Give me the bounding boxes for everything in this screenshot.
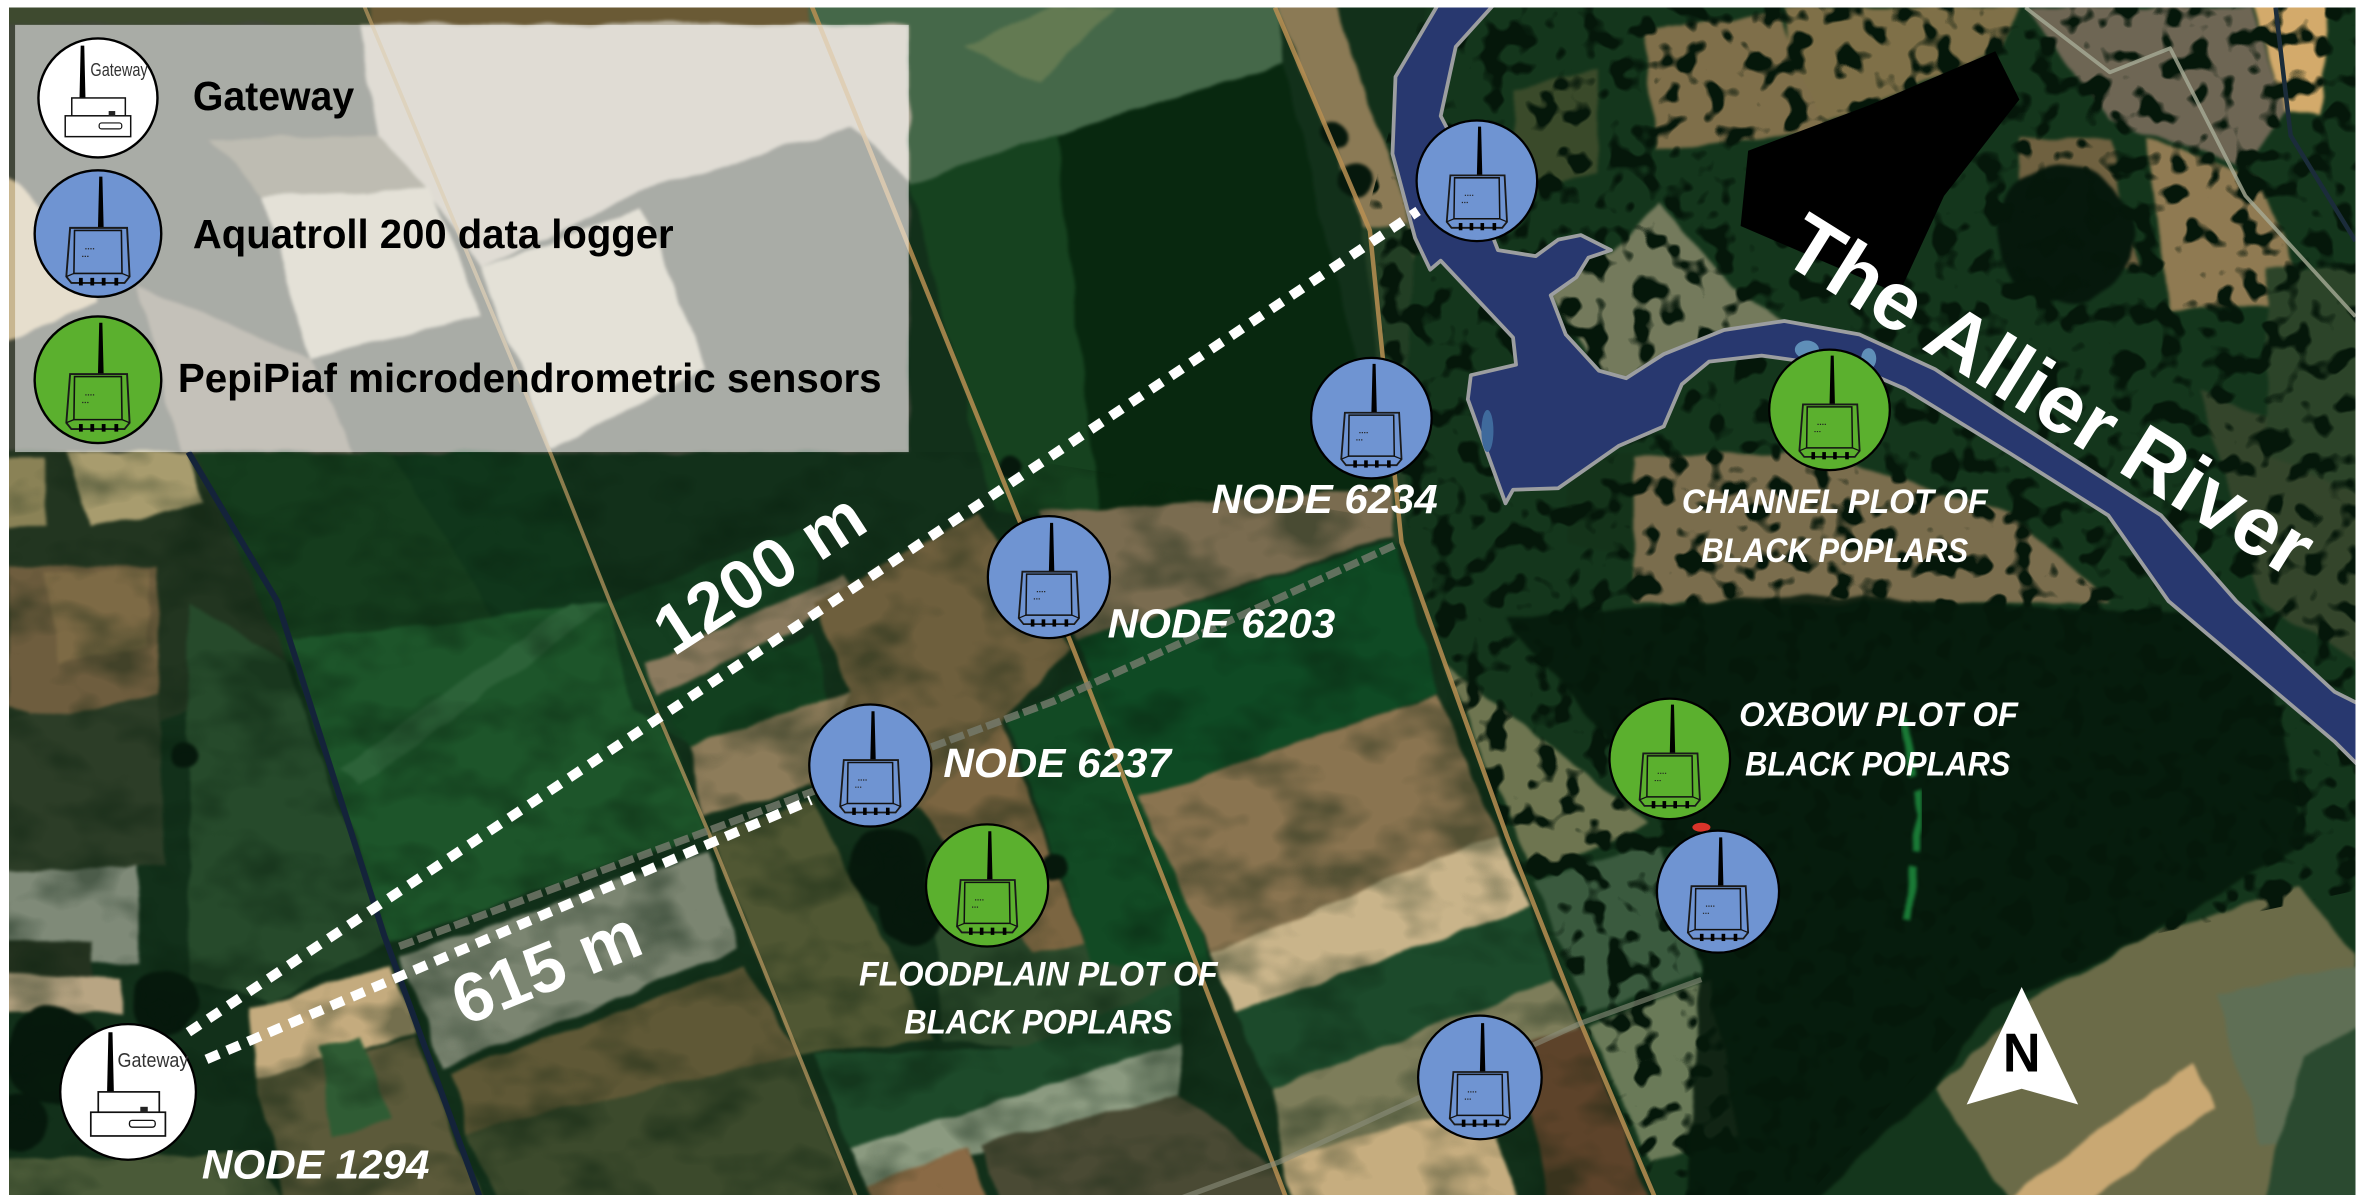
label: channel plot: CHANNEL PLOT OF — [1682, 483, 1989, 521]
node icon: 6237 — [809, 704, 931, 827]
node icon: south-east logger — [1657, 831, 1779, 953]
river: The Allier — [1392, 0, 2363, 781]
legend item: PepiPiaf microdendrometric sensors — [35, 316, 882, 443]
label: floodplain plot: BLACK POPLARS — [904, 1004, 1172, 1042]
panel: legend — [15, 25, 909, 452]
tree canopy texture, east side — [1364, 0, 2363, 1195]
sensor icon: floodplain plot — [926, 824, 1048, 946]
red marker — [1692, 823, 1710, 832]
river label: The Allier River — [1769, 196, 2331, 595]
label: floodplain plot: FLOODPLAIN PLOT OF — [859, 956, 1218, 994]
label: oxbow plot: OXBOW PLOT OF — [1739, 696, 2019, 734]
label: NODE 1294: NODE 1294 — [202, 1141, 429, 1187]
distance label: 1200 m: 1200 m — [639, 476, 879, 670]
node icon: 6203 — [988, 516, 1110, 638]
legend item: Aquatroll 200 data logger: Aquatroll 200 data logger — [193, 211, 674, 257]
sensor icon: channel plot — [1769, 350, 1890, 470]
label: oxbow plot: BLACK POPLARS — [1745, 745, 2010, 783]
farm fields, west side — [0, 0, 1650, 1204]
label: channel plot — [1682, 483, 1989, 570]
woods and clearings, east side — [1402, 0, 2363, 1204]
legend item: PepiPiaf microdendrometric sensors: PepiPiaf microdendrometric sensors — [178, 355, 882, 401]
icon: north arrow — [1967, 987, 2078, 1105]
dense forest — [1507, 595, 2306, 1204]
sensor icon: oxbow plot — [1609, 699, 1730, 819]
bright green streak — [1902, 716, 1921, 919]
node icon: river logger — [1417, 121, 1537, 241]
legend item: Aquatroll 200 data logger — [35, 170, 674, 297]
tree clumps — [0, 122, 2134, 1153]
legend item: gateway: Gateway — [193, 73, 355, 119]
gateway icon: node 1294: Gateway — [118, 1050, 189, 1072]
dashed link: gateway to river node, 1200 m — [188, 211, 1418, 1032]
node icon: south logger — [1418, 1016, 1542, 1139]
label: oxbow plot — [1739, 696, 2019, 783]
label: NODE 6234: NODE 6234 — [1212, 476, 1438, 522]
label: channel plot: BLACK POPLARS — [1701, 532, 1968, 570]
legend item: gateway: Gateway — [90, 60, 148, 80]
label: NODE 6203: NODE 6203 — [1108, 600, 1336, 646]
node icon: 6234 — [1311, 358, 1432, 478]
crop texture, west side — [9, 452, 1658, 1195]
gateway icon: node 1294 — [60, 1024, 196, 1160]
black lake — [1741, 51, 2019, 294]
icon: north arrow: N — [2003, 1023, 2040, 1083]
dashed link: gateway to node 6237, 615 m — [206, 800, 811, 1059]
label: floodplain plot — [859, 956, 1218, 1042]
label: NODE 6237: NODE 6237 — [943, 740, 1173, 786]
distance label: 615 m: 615 m — [441, 894, 652, 1040]
legend item: gateway — [38, 38, 355, 157]
